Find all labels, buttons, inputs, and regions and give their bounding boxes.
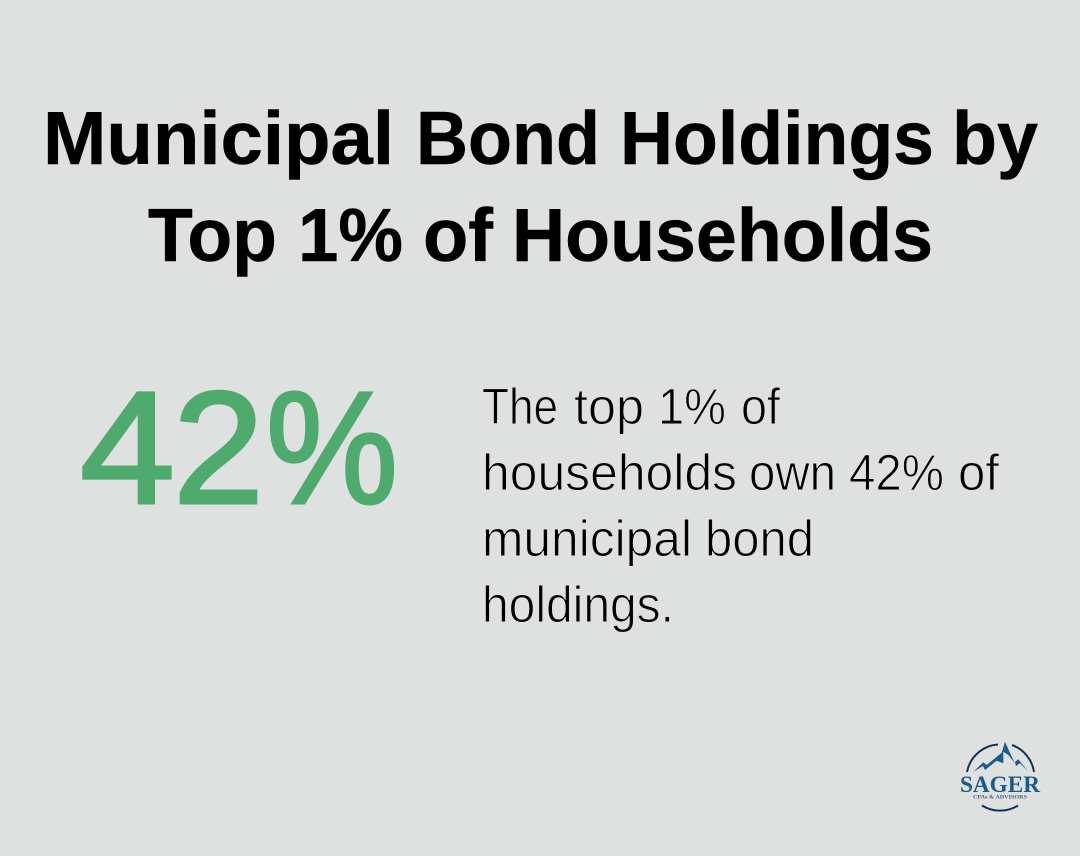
- logo ring: [967, 744, 1034, 811]
- description text: households: [482, 444, 737, 501]
- title: [43, 96, 1038, 277]
- description text: The: [482, 378, 558, 435]
- title: Holdings: [620, 96, 934, 180]
- logo tagline: CPAs & ADVISORS: [973, 794, 1027, 800]
- description text: top: [574, 378, 644, 435]
- logo wordmark: SAGER: [960, 772, 1040, 797]
- description text: municipal: [482, 510, 692, 567]
- big stat: 42%: %: [266, 358, 398, 537]
- title: of: [423, 193, 494, 277]
- title: by: [952, 96, 1038, 180]
- title: Bond: [416, 96, 600, 180]
- title: Households: [512, 193, 933, 277]
- title: Municipal: [43, 96, 394, 180]
- logo: Sager CPAs and Advisors: [960, 742, 1040, 811]
- big stat: 42%: [80, 358, 398, 537]
- description text: of: [958, 444, 1000, 501]
- title: Top: [148, 193, 277, 277]
- description text: bond: [705, 510, 814, 567]
- description text: 1%: [658, 378, 726, 435]
- description text: 42%: [849, 444, 944, 501]
- big stat: 42%: 4: [80, 358, 175, 537]
- logo mountains: [973, 742, 1028, 772]
- description text: holdings.: [482, 576, 674, 633]
- big stat: 42%: 2: [173, 358, 264, 537]
- title: 1%: [298, 193, 403, 277]
- description text: [482, 378, 1000, 633]
- description text: of: [741, 378, 781, 435]
- description text: own: [749, 444, 836, 501]
